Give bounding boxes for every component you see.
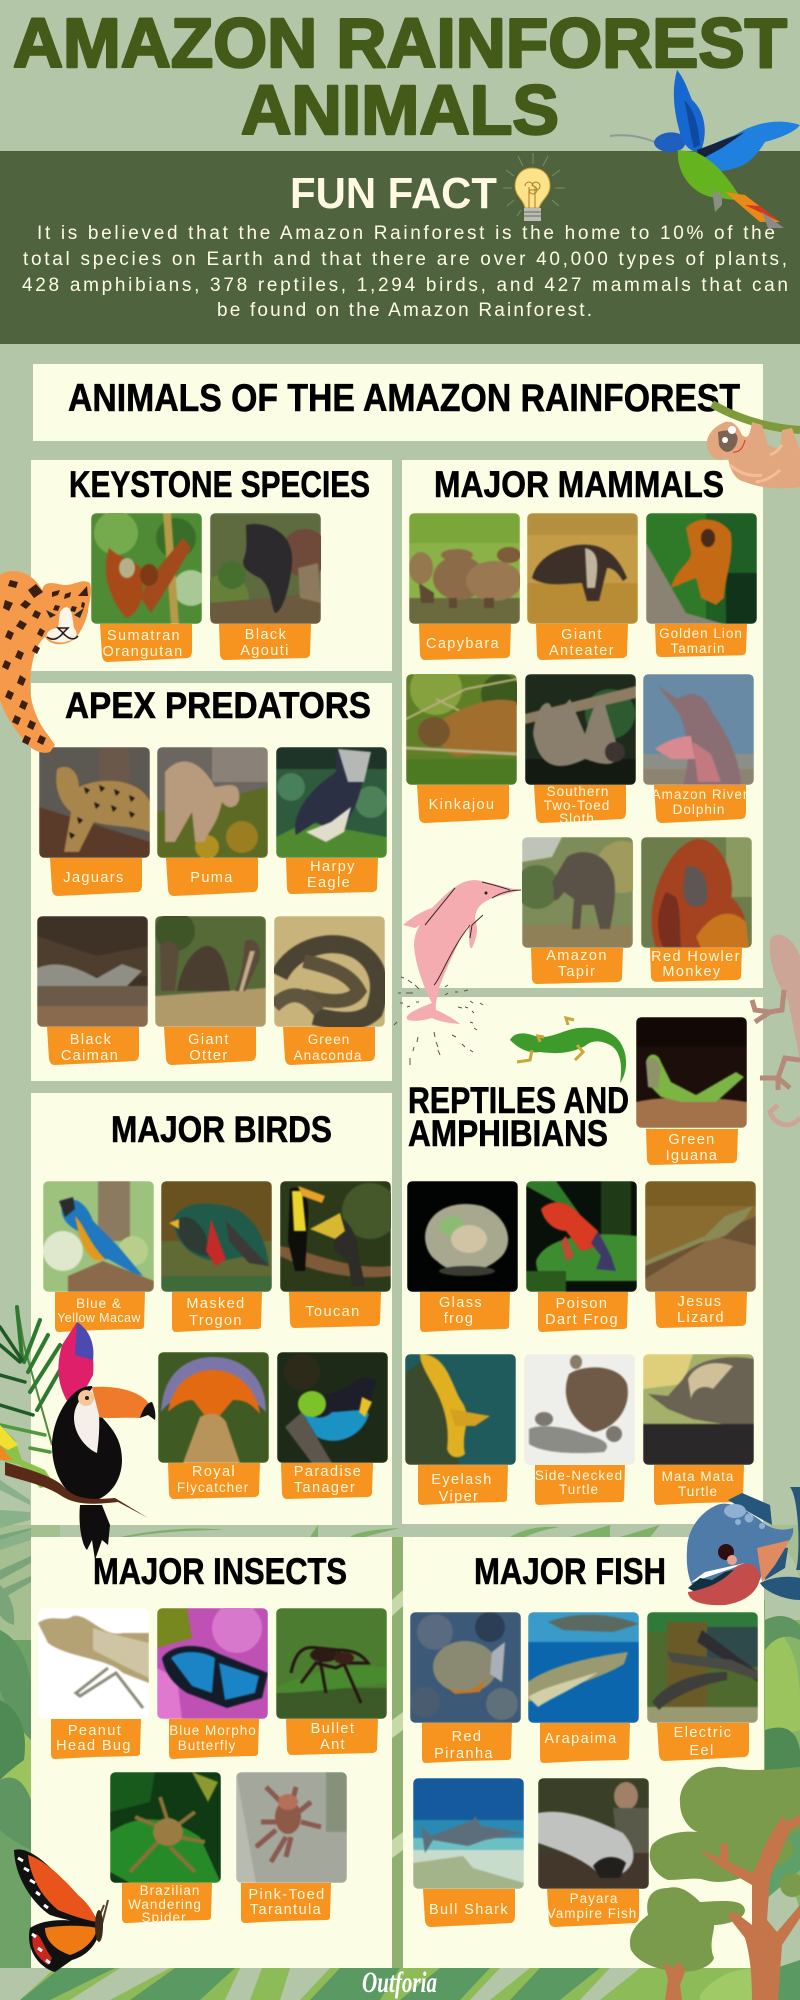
- label: brazilian wandering spider: Brazilian: [140, 1883, 200, 1898]
- label: amazon river dolphin: Dolphin: [673, 802, 725, 817]
- heading: apex predators: APEX PREDATORS: [65, 685, 371, 726]
- label: arapaima: [540, 1723, 630, 1763]
- label: puma: Puma: [190, 870, 234, 886]
- photo: glass frog: [407, 1181, 518, 1292]
- label: eyelash viper: Viper: [439, 1489, 479, 1505]
- label: blue morpho butterfly: [169, 1719, 259, 1759]
- panel: keystone species: [31, 460, 392, 671]
- photo: harpy eagle: [276, 747, 387, 858]
- label: black caiman: [47, 1027, 139, 1065]
- photo: jaguars: [39, 747, 150, 858]
- label: black agouti: [219, 624, 311, 660]
- photo: black agouti: [210, 513, 321, 624]
- label: capybara: Capybara: [426, 636, 500, 652]
- label: black agouti: Black: [245, 627, 287, 643]
- icon: light bulb: [503, 153, 565, 221]
- photo: kinkajou: [406, 674, 517, 785]
- icon: hummingbird: [610, 70, 800, 228]
- label: jesus lizard: Lizard: [677, 1310, 725, 1326]
- icon: sloth: [707, 404, 800, 488]
- photo: side-necked turtle: [524, 1354, 635, 1465]
- photo: pink-toed tarantula: [236, 1772, 347, 1883]
- icon: butterfly: [14, 1849, 108, 1972]
- label: electric eel: Electric: [674, 1725, 732, 1741]
- photo: blue and yellow macaw: [43, 1181, 154, 1292]
- label: side-necked turtle: Turtle: [559, 1482, 599, 1497]
- jungle background: [0, 1525, 800, 2000]
- heading: reptiles and amphibians: AMPHIBIANS: [408, 1113, 608, 1154]
- photo: capybara: [409, 513, 522, 624]
- icon: trees: [630, 1767, 800, 2000]
- label: sumatran orangutan: Orangutan: [102, 644, 184, 660]
- label: amazon river dolphin: Amazon River: [652, 787, 748, 802]
- label: bullet ant: Ant: [320, 1737, 346, 1753]
- label: sumatran orangutan: Sumatran: [107, 628, 181, 644]
- label: southern two-toed sloth: [534, 784, 626, 826]
- label: masked trogon: Trogon: [189, 1313, 243, 1329]
- photo: bullet ant: [276, 1608, 387, 1719]
- label: harpy eagle: Harpy: [310, 859, 356, 875]
- label: poison dart frog: Poison: [556, 1296, 608, 1312]
- panel: major fish: [403, 1537, 764, 1968]
- label: jaguars: [50, 858, 142, 896]
- label: red piranha: Piranha: [434, 1746, 494, 1762]
- label: peanut head bug: [51, 1719, 141, 1759]
- photo: masked trogon: [161, 1181, 272, 1292]
- label: giant anteater: Anteater: [549, 643, 615, 659]
- label: blue morpho butterfly: Blue Morpho: [169, 1723, 257, 1738]
- photo: giant otter: [155, 911, 266, 1027]
- label: mata mata turtle: Turtle: [678, 1484, 718, 1499]
- heading: major insects: MAJOR INSECTS: [93, 1551, 347, 1592]
- icon: pink river dolphin: [394, 880, 521, 1065]
- label: amazon tapir: Tapir: [558, 964, 596, 980]
- label: mata mata turtle: Mata Mata: [662, 1469, 734, 1484]
- label: royal flycatcher: Royal: [192, 1464, 236, 1480]
- label: eyelash viper: [418, 1465, 508, 1505]
- label: peanut head bug: Head Bug: [56, 1738, 132, 1754]
- label: amazon tapir: [531, 948, 623, 984]
- label: jesus lizard: [655, 1292, 747, 1328]
- label: amazon river dolphin: [652, 785, 748, 823]
- label: southern two-toed sloth: Two-Toed: [544, 798, 610, 813]
- panel: major birds: [31, 1093, 398, 1525]
- text: fun fact body: total species on Earth and that there are over 40,000 types of plants,: [23, 249, 787, 270]
- label: paradise tanager: Tanager: [294, 1480, 356, 1496]
- label: glass frog: Glass: [439, 1295, 483, 1311]
- panel: fun fact: [0, 151, 800, 344]
- photo: toucan: [280, 1181, 398, 1292]
- label: giant otter: [164, 1027, 256, 1065]
- label: red piranha: Red: [452, 1729, 482, 1745]
- label: poison dart frog: [538, 1292, 628, 1332]
- label: harpy eagle: Eagle: [307, 875, 351, 891]
- label: blue and yellow macaw: Yellow Macaw: [57, 1311, 141, 1325]
- label: toucan: Toucan: [305, 1304, 361, 1320]
- label: southern two-toed sloth: Sloth: [559, 811, 595, 826]
- label: bull shark: [423, 1889, 515, 1927]
- label: electric eel: [657, 1723, 749, 1761]
- label: green anaconda: Anaconda: [294, 1048, 362, 1063]
- icon: toucan: [0, 1322, 155, 1560]
- label: sumatran orangutan: [100, 624, 192, 662]
- photo: amazon tapir: [522, 837, 633, 948]
- label: green iguana: Iguana: [666, 1148, 718, 1164]
- heading: major birds: MAJOR BIRDS: [111, 1109, 332, 1150]
- panel: reptiles and amphibians: [402, 997, 763, 1524]
- label: harpy eagle: [286, 858, 378, 894]
- heading: reptiles and amphibians: REPTILES AND: [408, 1080, 629, 1121]
- photo: jesus lizard: [645, 1181, 756, 1292]
- label: golden lion tamarin: Tamarin: [670, 641, 726, 656]
- panel: major insects: [31, 1537, 392, 1968]
- text: fun fact body: 428 amphibians, 378 reptiles, 1,294 birds, and 427 mammals that can: [22, 275, 788, 296]
- label: mata mata turtle: [654, 1465, 744, 1505]
- icon: gecko: [752, 935, 800, 1125]
- text: fun fact body: [22, 223, 788, 321]
- label: southern two-toed sloth: Southern: [547, 784, 609, 799]
- heading: major fish: MAJOR FISH: [474, 1551, 666, 1592]
- label: giant otter: Otter: [189, 1048, 229, 1064]
- label: royal flycatcher: Flycatcher: [177, 1480, 249, 1495]
- label: bullet ant: [286, 1719, 378, 1755]
- photo: arapaima: [528, 1612, 639, 1723]
- label: kinkajou: [417, 785, 509, 823]
- label: giant otter: Giant: [188, 1032, 230, 1048]
- label: green iguana: Green: [668, 1132, 716, 1148]
- heading: reptiles and amphibians: [408, 1080, 629, 1154]
- label: brazilian wandering spider: [122, 1883, 212, 1925]
- text: fun fact body: be found on the Amazon Rainforest.: [217, 300, 592, 321]
- label: payara vampire fish: Vampire Fish: [547, 1906, 637, 1921]
- label: toucan: [289, 1292, 381, 1328]
- title: AMAZON RAINFOREST: [13, 4, 787, 82]
- label: black agouti: Agouti: [240, 643, 290, 659]
- label: giant anteater: [536, 624, 628, 660]
- label: masked trogon: [172, 1292, 262, 1332]
- title: [13, 4, 787, 149]
- label: glass frog: frog: [444, 1311, 474, 1327]
- photo: golden lion tamarin: [646, 513, 757, 624]
- label: green anaconda: [283, 1027, 375, 1065]
- label: paradise tanager: [281, 1463, 373, 1499]
- label: red piranha: [422, 1723, 512, 1763]
- label: bullet ant: Bullet: [311, 1721, 355, 1737]
- label: black caiman: Caiman: [61, 1048, 119, 1064]
- photo: brazilian wandering spider: [110, 1772, 221, 1883]
- icon: green lizard: [510, 1018, 626, 1083]
- label: brazilian wandering spider: Wandering: [128, 1897, 202, 1912]
- label: green iguana: [646, 1129, 738, 1165]
- label: electric eel: Eel: [689, 1743, 715, 1759]
- label: blue morpho butterfly: Butterfly: [178, 1738, 236, 1753]
- photo: red howler monkey: [641, 837, 752, 948]
- panel: animals of the amazon rainforest banner: [33, 364, 763, 441]
- photo: electric eel: [647, 1612, 758, 1723]
- photo: black caiman: [37, 916, 148, 1027]
- label: glass frog: [420, 1292, 510, 1332]
- label: red howler monkey: Monkey: [662, 964, 722, 980]
- label: royal flycatcher: [168, 1463, 260, 1499]
- icon: palm leaves: [0, 1307, 60, 1550]
- label: jaguars: Jaguars: [63, 870, 125, 886]
- label: green anaconda: Green: [308, 1032, 350, 1047]
- photo: green anaconda: [274, 916, 385, 1027]
- photo: giant anteater: [527, 513, 638, 624]
- photo: mata mata turtle: [643, 1354, 754, 1465]
- photo: paradise tanager: [277, 1352, 388, 1463]
- label: side-necked turtle: [535, 1465, 625, 1505]
- label: side-necked turtle: Side-Necked: [535, 1468, 623, 1483]
- photo: red piranha: [410, 1612, 521, 1723]
- title: ANIMALS: [241, 71, 559, 149]
- label: masked trogon: Masked: [186, 1296, 246, 1312]
- heading: major mammals: MAJOR MAMMALS: [434, 464, 724, 505]
- label: paradise tanager: Paradise: [294, 1464, 362, 1480]
- label: poison dart frog: Dart Frog: [545, 1312, 619, 1328]
- label: kinkajou: Kinkajou: [429, 797, 495, 813]
- label: pink-toed tarantula: Pink-Toed: [248, 1887, 326, 1903]
- panel: apex predators: [31, 683, 392, 1081]
- label: arapaima: Arapaima: [544, 1731, 618, 1747]
- label: amazon tapir: Amazon: [546, 948, 608, 964]
- photo: puma: [157, 747, 268, 859]
- label: golden lion tamarin: Golden Lion: [659, 626, 743, 641]
- photo: poison dart frog: [526, 1181, 637, 1292]
- label: black caiman: Black: [70, 1032, 112, 1048]
- label: puma: [166, 858, 258, 896]
- photo: amazon river dolphin: [643, 674, 754, 785]
- label: brazilian wandering spider: Spider: [141, 1910, 187, 1925]
- photo: royal flycatcher: [158, 1352, 269, 1463]
- label: golden lion tamarin: [655, 624, 747, 657]
- label: blue and yellow macaw: [55, 1292, 145, 1332]
- heading: fun fact: FUN FACT: [290, 169, 497, 218]
- photo: payara vampire fish: [538, 1778, 649, 1889]
- label: bull shark: Bull Shark: [429, 1902, 509, 1918]
- label: eyelash viper: Eyelash: [431, 1472, 493, 1488]
- photo: southern two-toed sloth: [525, 674, 636, 785]
- label: pink-toed tarantula: Tarantula: [250, 1902, 322, 1918]
- text: fun fact body: It is believed that the Amazon Rainforest is the home to 10% of the: [37, 223, 775, 244]
- heading: keystone species: KEYSTONE SPECIES: [69, 464, 370, 505]
- icon: jaguar: [0, 571, 91, 753]
- label: peanut head bug: Peanut: [68, 1723, 122, 1739]
- panel: major mammals: [402, 460, 763, 988]
- label: payara vampire fish: [547, 1889, 639, 1927]
- photo: eyelash viper: [405, 1354, 516, 1465]
- photo: bull shark: [413, 1778, 524, 1889]
- label: blue and yellow macaw: Blue &: [76, 1296, 122, 1311]
- label: red howler monkey: [650, 948, 742, 982]
- label: red howler monkey: Red Howler: [651, 949, 741, 965]
- photo: peanut head bug: [38, 1608, 149, 1719]
- label: capybara: [419, 624, 511, 660]
- text: outforia logo: Outforia: [362, 1966, 437, 1999]
- label: pink-toed tarantula: [241, 1883, 331, 1923]
- icon: piranha: [687, 1487, 800, 1605]
- label: payara vampire fish: Payara: [570, 1891, 618, 1906]
- label: jesus lizard: Jesus: [678, 1294, 722, 1310]
- label: giant anteater: Giant: [561, 627, 603, 643]
- photo: green iguana: [636, 1017, 747, 1128]
- photo: sumatran orangutan: [91, 511, 209, 624]
- photo: blue morpho butterfly: [157, 1603, 268, 1719]
